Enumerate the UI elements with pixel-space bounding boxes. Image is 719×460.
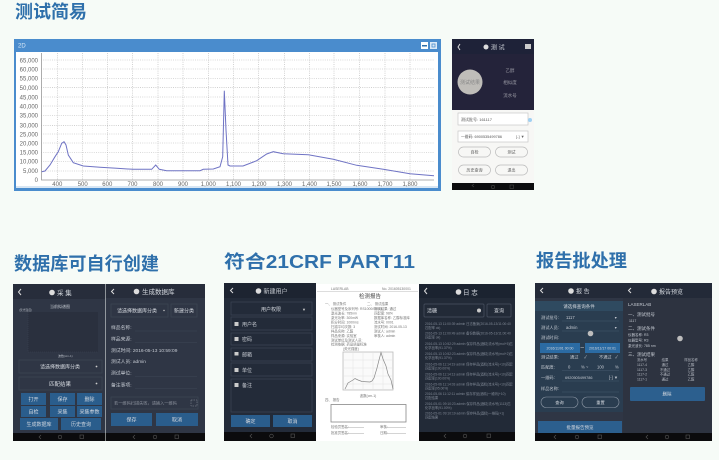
panel: report preview phone screen: 删除: [662, 390, 672, 398]
text block: report parameters: 激光功率: 300mW: [331, 315, 359, 320]
chart: spectrum line chart: 1,700: [377, 182, 393, 188]
text block: report parameters: 激光波长: 785nm: [331, 310, 357, 316]
text block: report parameters: 测试人: admin: [374, 328, 395, 334]
text block: report parameters: 审核人: admin: [374, 333, 395, 338]
text block: remarks and signatures: 日期:: [380, 430, 388, 435]
text block: report preview: 1117: [629, 319, 636, 323]
chart: spectrum line chart: 65,000: [20, 58, 39, 64]
form: query conditions: 一维码:: [541, 374, 555, 381]
text block: log entries: 匹配结果: [425, 414, 439, 420]
gauge: test result circle: [458, 70, 482, 94]
chart: spectrum line chart: 1,100: [226, 182, 242, 188]
panel: test report document: [316, 284, 419, 441]
chart: spectrum line chart: 60,000: [20, 68, 39, 74]
panel: test report document: 检测报告: [359, 292, 381, 300]
panel: generate database phone screen: 若一维码扫描失败，请输入一维码: [114, 400, 177, 406]
chart: spectrum line chart: [20, 53, 434, 188]
panel: test phone screen: [452, 39, 534, 190]
panel: new user phone screen: 取消: [287, 418, 298, 425]
chart: spectrum line chart: 20,000: [20, 142, 39, 148]
text block: report parameters: 测试结果: 通过: [374, 306, 397, 311]
text block: log entries: 匹配率 ok): [425, 334, 440, 340]
text block: log entries: 2016-05-13 10:52:23 admin 保存样品(酒精)流水号(mol+2)匹: [425, 351, 514, 356]
table: test results: 乙醇: [688, 367, 695, 372]
panel: generate database phone screen: 保存: [126, 416, 137, 424]
form: sample fields: 样品名称:: [111, 324, 132, 331]
table: test results: 1117-4: [637, 363, 647, 367]
panel: report query phone screen: 2016/11/17 00:01: [589, 346, 616, 350]
text block: report parameters: 测试时间: 2016-05-13: [374, 324, 407, 329]
form: sample fields: 样品来源:: [111, 336, 132, 342]
panel: report preview phone screen: [623, 283, 712, 441]
text block: log entries: 匹配率 ok): [425, 325, 440, 330]
text block: report preview: 三、测试结果: [628, 351, 655, 358]
panel: new user phone screen: 用户权限: [261, 306, 281, 313]
form: query conditions: 6920505499786: [565, 376, 592, 380]
form: query conditions: admin: [566, 325, 578, 330]
text block: report parameters: 数据库名称: 乙醇标准库: [374, 315, 410, 320]
chart: spectrum line chart: 5,000: [23, 169, 39, 175]
panel: test report document: LASERLAB: [331, 287, 349, 291]
form: sample fields: 测试时间: 2016-05-13 10:59:09: [111, 347, 178, 354]
text block: report parameters: 二、 测试结果: [367, 301, 389, 306]
table: test results: 1117-2: [637, 372, 647, 376]
chart: spectrum line chart: 10,000: [20, 160, 39, 166]
chart: spectrum line chart: 900: [178, 182, 189, 188]
buttons: acquisition actions: [20, 393, 102, 430]
text block: log entries: 2016-05-06 11:14:13 admin 保存样品(酒精)流水号(+10)匹配: [425, 372, 513, 376]
panel: report query phone screen: 报 告: [576, 288, 590, 296]
table: test results: 1117-1: [637, 378, 647, 382]
form: query conditions: ▼: [614, 326, 617, 330]
text block: log entries: 化学品率(91.37%): [425, 355, 452, 360]
panel: acquisition phone screen: 采 集: [57, 288, 72, 297]
form: query conditions: 不通过: [599, 354, 612, 360]
form: query conditions: 样品名称:: [541, 385, 559, 392]
chart: spectrum line chart: 50,000: [20, 86, 39, 92]
chart: empty live spectrum: 波数(cm-1): [58, 353, 73, 358]
panel: report query phone screen: 重置: [596, 399, 605, 406]
text block: report parameters: 测试单位及测试人员:: [331, 338, 363, 342]
panel: generate database phone screen: 取消: [172, 416, 182, 424]
text block: report parameters: 扫描平均次数: 3: [331, 324, 355, 329]
heading: simple testing: 测试简易: [15, 1, 87, 22]
table: test results: 通过: [662, 362, 669, 367]
panel: acquisition phone screen: 当前拟谱图: [50, 303, 70, 309]
text block: log entries: 2016-05-13 10:52:29 admin 保存样品(酒精)流水号(mol+5)匹: [425, 341, 514, 346]
panel: acquisition phone screen: 匹配结果: [49, 380, 71, 388]
text block: log entries: 化学品率(91.37%): [425, 345, 452, 350]
panel: test report document: No. 201605130001: [382, 287, 411, 291]
text block: log entries: 匹配结果: [425, 395, 439, 400]
chart: spectrum line chart: 1,500: [326, 182, 342, 188]
panel: report query phone screen: 2016/11/01 00:00: [546, 346, 574, 350]
form: user fields: [234, 321, 257, 389]
form: user fields: 备注: [242, 382, 252, 389]
panel: report query phone screen: 请选择查询条件: [563, 303, 595, 310]
chart: spectrum line chart: 700: [127, 182, 138, 188]
chart: spectrum line chart: 30,000: [20, 124, 39, 130]
chart: spectrum line chart: 55,000: [20, 77, 39, 83]
text block: remarks and signatures: 批准员签名:: [331, 430, 349, 435]
panel: new user phone screen: 新建用户: [264, 288, 288, 296]
chart: spectrum line chart: 600: [102, 182, 113, 188]
form: query conditions: ✓: [584, 354, 587, 360]
panel: test phone screen: 自检: [470, 148, 478, 154]
heading: 21CFR part 11 compliance: 符合21CRF PART11: [224, 251, 415, 272]
text block: report parameters: 样品名称: 乙醇: [331, 328, 354, 334]
panel: test phone screen: 一维码: 6900535499786: [461, 134, 502, 139]
table: test results: 乙醇: [688, 376, 695, 382]
panel: test phone screen: 乙醇: [506, 67, 515, 74]
chart: report spectrum: 波数(cm-1): [360, 393, 376, 398]
form: sample fields: 测试人员: admin: [111, 358, 146, 365]
panel: test phone screen: 退出: [508, 166, 516, 172]
text block: report parameters: 检测依据: 药品质量标准: [331, 342, 367, 346]
heading: user-created database: 数据库可自行创建: [14, 254, 159, 274]
heading: batch report processing: 报告批处理: [536, 251, 627, 271]
text block: report parameters: 仪器型号及序列号: RS1000/00001: [331, 306, 383, 311]
panel: log phone screen: 查询: [494, 308, 504, 314]
panel: test phone screen: 测试批号: 161117: [461, 116, 493, 122]
panel: new user phone screen: 确定: [245, 418, 256, 425]
chart: report spectrum: (荧光强度): [343, 346, 359, 351]
form: query conditions: 通过: [570, 354, 579, 360]
buttons: acquisition actions: 打开: [28, 396, 39, 403]
panel: log phone screen: 清糖: [427, 308, 437, 314]
panel: log phone screen: 日 志: [463, 288, 478, 296]
panel: log phone screen: [419, 284, 515, 441]
panel: generate database phone screen: 新建分类: [174, 308, 194, 314]
panel: new user phone screen: [224, 283, 316, 441]
chart: spectrum line chart: 1,400: [302, 182, 318, 188]
table: test results: 结果: [662, 357, 669, 362]
text block: remarks and signatures: 检验员签名:: [331, 424, 349, 429]
text block: log entries: 2016-05-13 11:00:39 admin 日志备案(2016-05-13/11:00:40: [425, 321, 511, 326]
text block: log entries: 2016-05-06 11:12:11 admin 保存样品(酒精)一维码(+10): [425, 391, 506, 396]
chart: spectrum line chart: 0: [35, 178, 39, 184]
panel: spectrum chart window: [14, 39, 441, 191]
text block: log entries: 匹配率(100.00%): [425, 376, 450, 380]
chart: spectrum line chart: 15,000: [20, 150, 39, 156]
form: query conditions: [-] ▼: [609, 375, 618, 380]
form: query conditions: 100: [597, 364, 605, 370]
buttons: acquisition actions: 采集参数: [79, 408, 100, 416]
table: test results: 乙醇: [688, 362, 695, 367]
panel: spectrum chart window: 2D: [18, 44, 26, 50]
text block: remarks and signatures: 审核:: [380, 424, 388, 429]
form: query conditions: 匹配度:: [541, 364, 555, 370]
form: sample fields: [111, 324, 178, 388]
panel: generate database phone screen: 生成数据库: [142, 287, 175, 296]
text block: report preview: 仪器名称: R3: [628, 332, 648, 337]
form: sample fields: 测试单位:: [111, 370, 132, 376]
table: test results: 通过: [662, 376, 669, 382]
form: query conditions: 测试人员:: [541, 324, 559, 331]
text block: log entries: 2016-05-01 09:10:23 admin 保存样品(酒精)流水号(1113)匹: [425, 401, 511, 406]
buttons: acquisition actions: 删除: [84, 396, 95, 403]
form: query conditions: 1117: [566, 315, 575, 320]
table: test results: 乙醇: [688, 372, 695, 376]
text block: report preview: 激光波长: 785 nm: [628, 343, 656, 348]
text block: report parameters: 一、 测试条件: [325, 301, 347, 306]
table: test results: 流水号: [637, 357, 648, 362]
panel: test phone screen: [-] ▼: [516, 134, 525, 139]
text block: log entries: 化学品率(91.00%): [425, 405, 452, 410]
text block: report preview: 仪器型号: R3: [628, 338, 648, 342]
icon: window buttons: [421, 42, 437, 49]
text block: report parameters: 流水号: 0001: [374, 320, 394, 324]
text block: remarks and signatures: [325, 397, 406, 435]
text block: report preview: 二、测试条件: [628, 325, 655, 332]
chart: spectrum line chart: 800: [153, 182, 164, 188]
panel: test phone screen: 相似度: [503, 79, 517, 86]
form: query conditions: 测试结果:: [541, 354, 559, 360]
table: test results: 不通过: [660, 372, 671, 376]
panel: generate database phone screen: 请选择数据库分类: [117, 308, 157, 314]
form: query conditions: %: [615, 364, 619, 370]
text block: report parameters: 样品来源: 实验室: [331, 333, 357, 338]
chart: spectrum line chart: 40,000: [20, 104, 39, 110]
text block: log entries: 匹配率(95.00%): [425, 386, 448, 390]
form: user fields: 邮箱: [242, 352, 252, 358]
chart: spectrum line chart: 500: [78, 182, 88, 188]
panel: test phone screen: 测试: [508, 148, 516, 154]
text block: log entries: 2016-05-01 09:10:19 admin 保存样品(酒精)一维码(+1): [425, 410, 504, 416]
text block: report preview: LASERLAB: [628, 302, 651, 307]
panel: test phone screen: 测 试: [491, 44, 505, 52]
buttons: acquisition actions: 保存: [57, 396, 68, 403]
text block: report parameters: 匹配度: 98%: [374, 310, 393, 316]
form: query conditions: 0: [568, 364, 571, 370]
gauge: test result circle: 测试结果: [460, 79, 480, 86]
chart: spectrum line chart: 1,800: [402, 182, 418, 188]
text block: log entries: 匹配率(100.00%): [425, 366, 450, 370]
text block: log entries: [425, 321, 514, 420]
form: query conditions: 测试时间:: [541, 334, 559, 341]
text block: remarks and signatures: 四、 报告: [325, 397, 340, 402]
panel: new user phone screen: ▼: [302, 307, 306, 312]
text block: log entries: 2016-05-06 11:14:19 admin 保存样品(酒精)流水号(+10)匹配: [425, 362, 513, 366]
chart: spectrum line chart: 1,200: [251, 182, 267, 188]
chart: spectrum line chart: 25,000: [20, 132, 39, 138]
text block: report preview: [628, 302, 656, 358]
buttons: acquisition actions: 生成数据库: [26, 421, 52, 428]
chart: empty live spectrum: (荧光强度): [19, 308, 32, 312]
chart: spectrum line chart: 400: [52, 182, 63, 188]
table: test results: 1117-3: [637, 368, 647, 372]
text block: report parameters: [325, 301, 410, 346]
panel: generate database phone screen: [106, 284, 205, 441]
form: query conditions: 测试批号:: [541, 314, 559, 321]
panel: report query phone screen: [535, 283, 623, 441]
form: query conditions: ▼: [614, 316, 617, 320]
panel: test phone screen: 流水号: [503, 92, 517, 99]
form: query conditions: ✓: [615, 354, 618, 360]
panel: test phone screen: 历史查询: [466, 166, 482, 172]
panel: report query phone screen: 批量报告预览: [566, 424, 594, 431]
table: test results: 样品名称: [684, 357, 698, 362]
buttons: acquisition actions: 历史查询: [71, 421, 91, 428]
buttons: acquisition actions: 采集: [57, 408, 68, 416]
buttons: acquisition actions: 自检: [28, 408, 39, 416]
table: test results: [637, 357, 698, 382]
form: query conditions: [541, 314, 619, 392]
form: user fields: 密码: [242, 336, 252, 343]
panel: report preview phone screen: 报告预览: [659, 288, 683, 296]
chart: empty live spectrum: [19, 308, 98, 358]
panel: acquisition phone screen: 请选择数据库分类: [40, 364, 80, 370]
table: test results: 不通过: [660, 367, 671, 372]
form: user fields: 单位: [242, 367, 252, 374]
chart: spectrum line chart: 1,600: [352, 182, 368, 188]
text block: report parameters: 积分时间: 1000ms: [331, 320, 359, 324]
text block: log entries: 2016-05-06 11:14:03 admin 保存样品(酒精)流水号(+10)匹配: [425, 382, 513, 386]
form: user fields: 用户名: [242, 321, 257, 328]
chart: spectrum line chart: 35,000: [20, 114, 39, 120]
panel: report query phone screen: 查询: [555, 399, 564, 406]
form: sample fields: 备注事项:: [111, 382, 132, 388]
chart: report spectrum: [343, 346, 393, 398]
chart: spectrum line chart: 45,000: [20, 96, 39, 102]
text block: log entries: 2016-05-13 11:00:49 admin 备份数据(2016-05-13/11:00:40: [425, 330, 511, 336]
chart: spectrum line chart: 1,000: [201, 182, 216, 188]
text block: report preview: 一、测试批号: [628, 311, 655, 318]
form: query conditions: % ~: [581, 364, 589, 370]
panel: acquisition phone screen: [13, 284, 105, 441]
chart: spectrum line chart: 1,300: [277, 182, 293, 188]
